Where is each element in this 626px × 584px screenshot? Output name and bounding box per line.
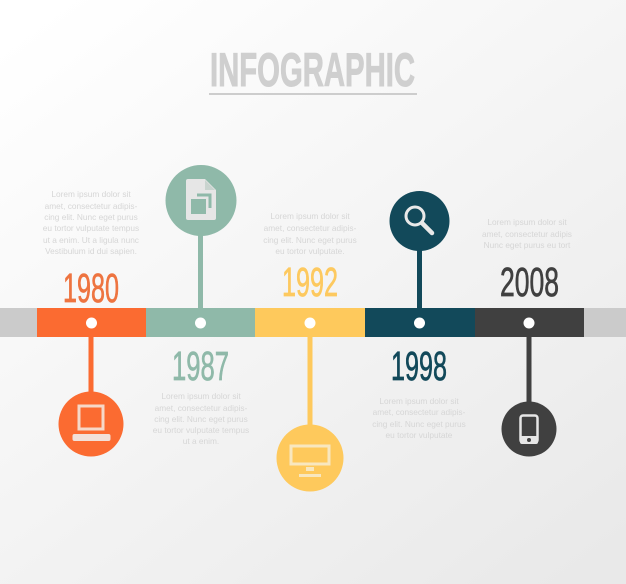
text: 1987 description: amet, consectetur adipis- xyxy=(155,403,248,413)
text: 1980 description: Lorem ipsum dolor sit xyxy=(51,189,131,199)
connector 2008 xyxy=(526,337,532,407)
icon: laptop xyxy=(58,392,124,456)
icon: monitor xyxy=(276,424,344,492)
text: 1987 description: cing elit. Nunc eget purus xyxy=(154,414,248,424)
text: 1992 description: cing elit. Nunc eget purus xyxy=(263,235,357,245)
milestone 1998 xyxy=(372,191,466,440)
year 2008: 2008 xyxy=(500,259,559,305)
year 1987: 1987 xyxy=(172,343,229,389)
connector 1992 xyxy=(308,337,312,427)
text: 1987 description: Lorem ipsum dolor sit xyxy=(161,391,241,401)
text: 1980 description: amet, consectetur adipis- xyxy=(45,201,138,211)
text: 2008 description: Nunc eget purus eu tort xyxy=(484,240,571,250)
text: 1980 description: cing elit. Nunc eget purus xyxy=(44,212,138,222)
year 1992: 1992 xyxy=(282,259,338,305)
text: 1998 description: cing elit. Nunc eget purus xyxy=(372,419,466,429)
text: 2008 description: Lorem ipsum dolor sit xyxy=(487,217,567,227)
text: 1998 description: Lorem ipsum dolor sit xyxy=(379,396,459,406)
connector 1998 xyxy=(417,245,422,308)
milestone 1987 xyxy=(153,165,249,446)
text: 1987 description: eu tortor vulputate tempus xyxy=(153,425,249,435)
year 1998: 1998 xyxy=(391,343,447,389)
text: 1980 description: eu tortor vulputate tempus xyxy=(43,223,139,233)
text: 1998 description: amet, consectetur adipis- xyxy=(373,407,466,417)
text: 2008 description: amet, consectetur adipis xyxy=(482,229,572,239)
text: 1992 description: Lorem ipsum dolor sit xyxy=(270,211,350,221)
year 1980: 1980 xyxy=(63,265,119,311)
text: 1992 description: amet, consectetur adipis- xyxy=(264,223,357,233)
text: 1980 description: ut a enim. Ut a ligula nunc xyxy=(43,235,139,245)
connector 1987 xyxy=(198,230,203,308)
connector 1980 xyxy=(88,337,94,397)
icon: document xyxy=(166,165,236,236)
title: INFOGRAPHIC xyxy=(210,43,415,96)
icon: phone xyxy=(502,402,556,456)
milestone 2008 xyxy=(482,217,572,456)
text: 1992 description: eu tortor vulputate. xyxy=(275,246,345,256)
text: 1987 description: ut a enim. xyxy=(183,436,219,446)
milestone 1980 xyxy=(43,189,139,456)
icon: magnifier xyxy=(390,191,450,251)
milestone 1992 xyxy=(263,211,357,492)
text: 1998 description: eu tortor vulputate xyxy=(386,430,453,440)
text: 1980 description: Vestibulum id dui sapien. xyxy=(45,246,137,256)
timeline bar xyxy=(0,308,626,337)
